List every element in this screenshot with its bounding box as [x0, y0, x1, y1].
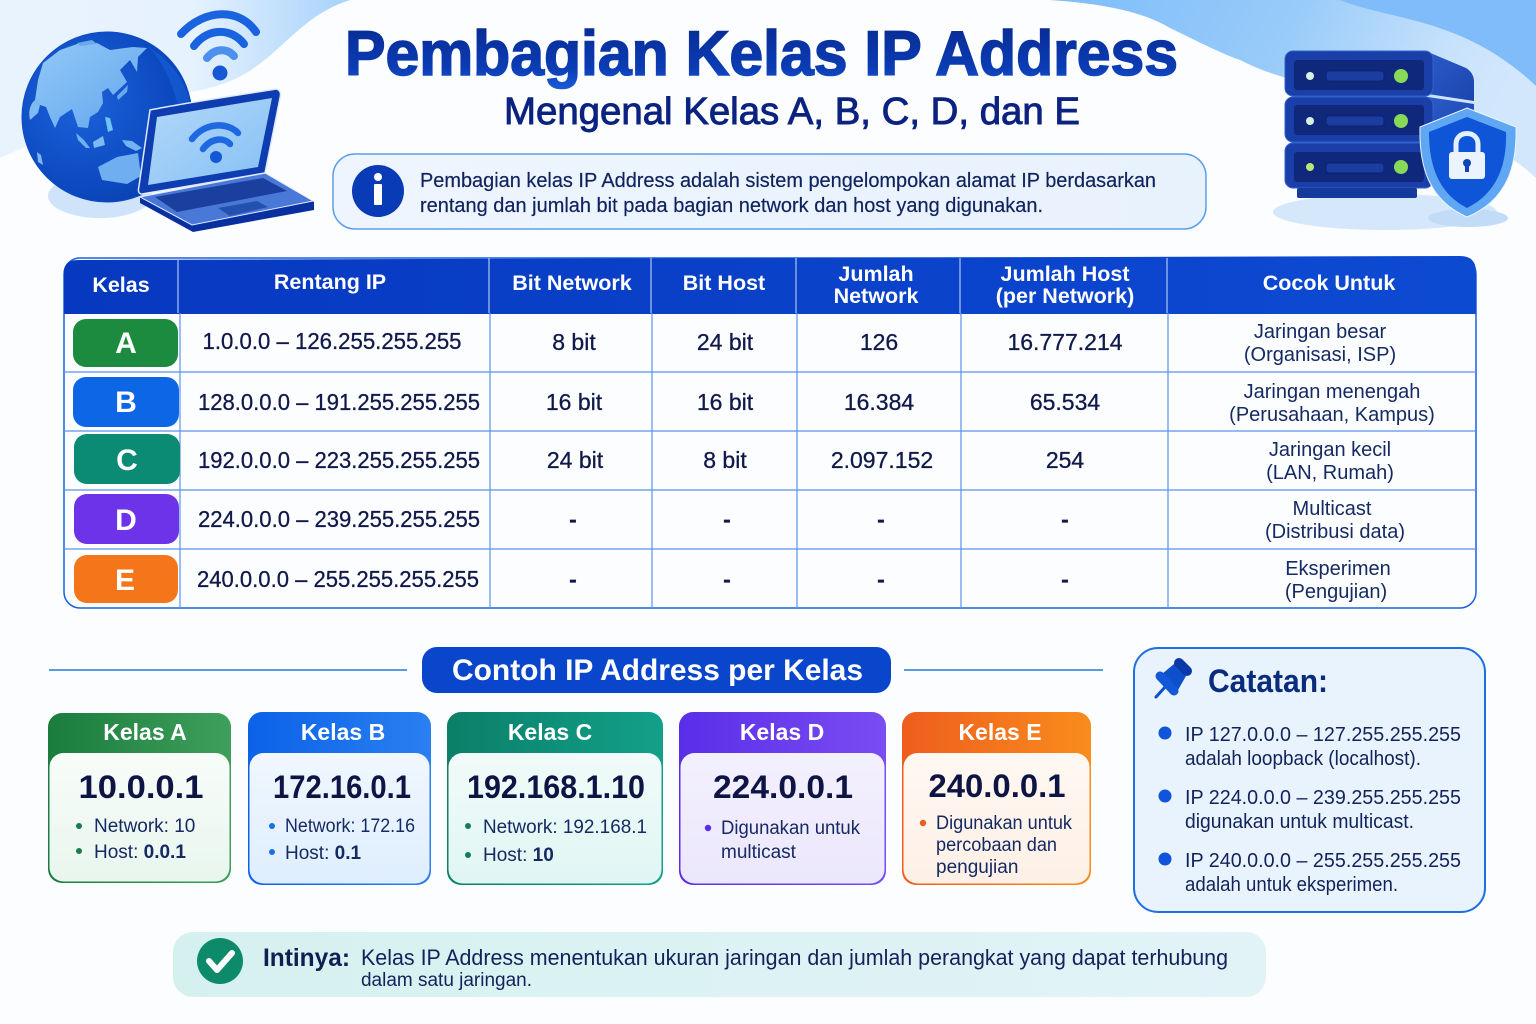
- row E: (Pengujian): [1285, 581, 1387, 603]
- card: Kelas C: [447, 712, 663, 885]
- card: Kelas B: [248, 712, 431, 885]
- card: Kelas D: multicast: [721, 842, 797, 863]
- card: Kelas A: [48, 713, 231, 883]
- icon: info circle: [352, 165, 404, 217]
- icon: globe: [22, 32, 192, 202]
- card: Kelas E: pengujian: [936, 857, 1018, 878]
- row A: (Organisasi, ISP): [1244, 344, 1396, 366]
- row C: [198, 439, 1394, 484]
- row E: -: [723, 566, 731, 592]
- row C: (LAN, Rumah): [1266, 462, 1394, 484]
- icon: check circle: [197, 938, 243, 984]
- card: Kelas D: 224.0.0.1: [713, 769, 853, 805]
- row D: -: [723, 506, 731, 532]
- table: IP classes: [64, 256, 1476, 608]
- title: Pembagian Kelas IP Address: [345, 19, 1178, 89]
- class badges: E: [115, 564, 135, 597]
- section heading: examples: Contoh IP Address per Kelas: [452, 654, 863, 687]
- row C: 8 bit: [703, 447, 747, 473]
- row A: Jaringan besar: [1254, 321, 1386, 343]
- panel: info description: [333, 154, 1206, 229]
- class badges: A: [115, 327, 137, 360]
- row B: 16 bit: [546, 389, 603, 415]
- notes list: adalah loopback (localhost).: [1185, 748, 1421, 770]
- notes list: IP 224.0.0.0 – 239.255.255.255: [1185, 787, 1461, 809]
- card: Kelas C: Kelas C: [508, 719, 592, 745]
- class badges: B: [115, 386, 137, 419]
- panel: notes: [1134, 648, 1485, 912]
- description text: rentang dan jumlah bit pada bagian network dan host yang digunakan.: [420, 195, 1043, 217]
- card: Kelas C: Host: 10: [483, 845, 554, 866]
- row E: -: [1061, 566, 1069, 592]
- row A: 126: [860, 329, 898, 355]
- icon: push pin: [1156, 663, 1187, 697]
- class badges: D: [115, 504, 137, 537]
- subtitle: Mengenal Kelas A, B, C, D, dan E: [504, 91, 1080, 133]
- notes list: IP 127.0.0.0 – 127.255.255.255: [1185, 724, 1461, 746]
- callout: summary: Kelas IP Address menentukan ukuran jaringan dan jumlah perangkat yang dapat terhubung: [361, 945, 1228, 970]
- card: Kelas C: 192.168.1.10: [467, 769, 645, 805]
- table header row: [64, 256, 1476, 314]
- card: Kelas B: Network: 172.16: [285, 816, 415, 837]
- card: Kelas A: Host: 0.0.1: [94, 842, 186, 863]
- row B: Jaringan menengah: [1244, 381, 1420, 403]
- icon: server rack with shield: [1273, 51, 1516, 230]
- row A: [202, 321, 1396, 366]
- row A: 24 bit: [697, 329, 754, 355]
- row E: [197, 558, 1391, 603]
- notes heading: Catatan:: [1208, 663, 1328, 699]
- row C: 192.0.0.0 – 223.255.255.255: [198, 447, 480, 473]
- table header row: Bit Host: [683, 271, 765, 295]
- card: Kelas E: percobaan dan: [936, 835, 1057, 856]
- row B: 16.384: [844, 389, 914, 415]
- row E: -: [877, 566, 885, 592]
- row C: 254: [1046, 447, 1084, 473]
- row D: Multicast: [1293, 498, 1372, 520]
- table header row: Jumlah Host: [1000, 262, 1130, 286]
- icon: laptop: [138, 89, 314, 232]
- row D: -: [1061, 506, 1069, 532]
- card: Kelas E: Kelas E: [958, 719, 1042, 745]
- table header row: Cocok Untuk: [1263, 271, 1395, 295]
- class badges: C: [116, 444, 138, 477]
- row D: 224.0.0.0 – 239.255.255.255: [198, 506, 480, 532]
- row D: -: [877, 506, 885, 532]
- notes list: digunakan untuk multicast.: [1185, 811, 1414, 833]
- callout: summary: Intinya:: [263, 944, 350, 972]
- row C: 24 bit: [547, 447, 604, 473]
- card: Kelas C: Network: 192.168.1: [483, 817, 647, 838]
- notes list: IP 240.0.0.0 – 255.255.255.255: [1185, 850, 1461, 872]
- card: Kelas E: [902, 712, 1091, 885]
- table header row: Rentang IP: [274, 270, 386, 294]
- class badges: [73, 319, 180, 603]
- notes list: adalah untuk eksperimen.: [1185, 874, 1398, 896]
- row A: 1.0.0.0 – 126.255.255.255: [202, 328, 462, 354]
- row C: Jaringan kecil: [1269, 439, 1391, 461]
- row E: -: [569, 566, 577, 592]
- card: Kelas A: Network: 10: [94, 816, 195, 837]
- card: Kelas B: 172.16.0.1: [273, 769, 411, 805]
- callout: summary: [173, 932, 1266, 997]
- card: Kelas B: Kelas B: [301, 719, 385, 745]
- row D: -: [569, 506, 577, 532]
- row B: [198, 381, 1435, 426]
- row C: 2.097.152: [831, 447, 933, 473]
- description text: Pembagian kelas IP Address adalah sistem pengelompokan alamat IP berdasarkan: [420, 170, 1156, 192]
- card: Kelas E: 240.0.0.1: [928, 768, 1066, 804]
- table header row: Network: [834, 284, 918, 308]
- row B: 128.0.0.0 – 191.255.255.255: [198, 389, 480, 415]
- row E: Eksperimen: [1285, 558, 1391, 580]
- row B: (Perusahaan, Kampus): [1229, 404, 1435, 426]
- icon: globe with wifi and laptop: [22, 14, 314, 232]
- table header row: Kelas: [92, 273, 150, 297]
- card: Kelas A: Kelas A: [103, 719, 187, 745]
- row B: 65.534: [1030, 389, 1100, 415]
- section heading: examples: [49, 647, 1103, 693]
- icon: wifi signal above globe: [181, 14, 256, 80]
- row D: [198, 498, 1405, 543]
- row A: 8 bit: [552, 329, 596, 355]
- card: Kelas E: Digunakan untuk: [936, 813, 1072, 834]
- row A: 16.777.214: [1007, 329, 1123, 355]
- card: Kelas D: [679, 712, 886, 885]
- card: Kelas A: 10.0.0.1: [78, 769, 204, 805]
- table header row: (per Network): [996, 284, 1134, 308]
- callout: summary: dalam satu jaringan.: [361, 970, 532, 991]
- icon: shield with lock: [1420, 108, 1516, 217]
- card: Kelas D: Digunakan untuk: [721, 818, 860, 839]
- card: Kelas D: Kelas D: [740, 719, 824, 745]
- row B: 16 bit: [697, 389, 754, 415]
- row D: (Distribusi data): [1265, 521, 1405, 543]
- table header row: Jumlah: [838, 262, 914, 286]
- notes list: [1158, 724, 1461, 896]
- table header row: Bit Network: [512, 271, 632, 295]
- card: Kelas B: Host: 0.1: [285, 843, 361, 864]
- row E: 240.0.0.0 – 255.255.255.255: [197, 566, 479, 592]
